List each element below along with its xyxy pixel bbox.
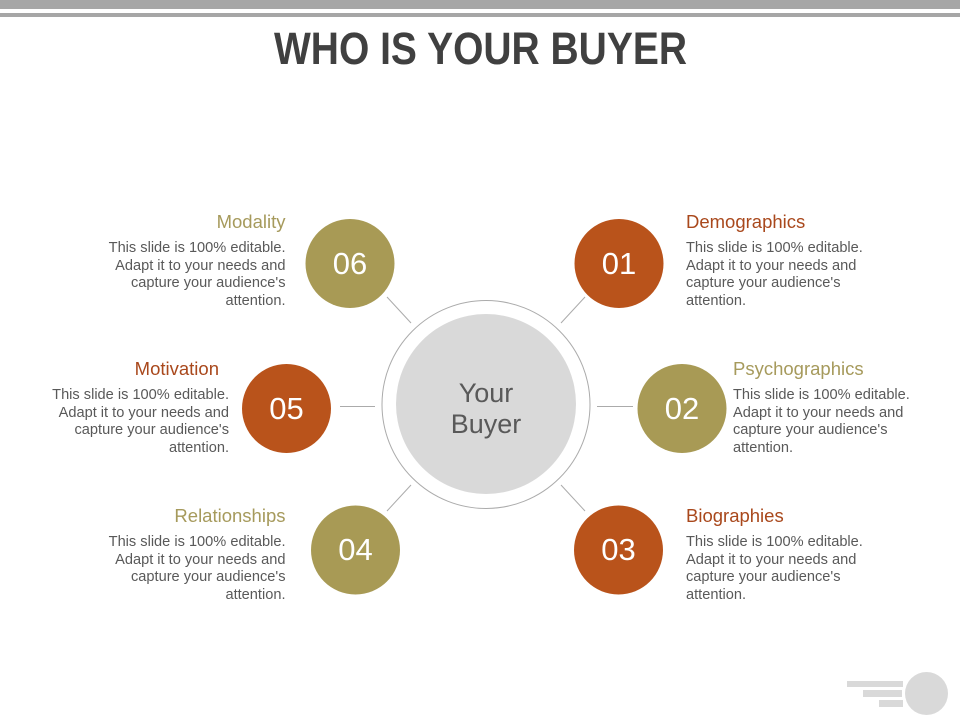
text block: Demographics: capture your audience's: [686, 275, 840, 291]
text block: Motivation: Adapt it to your needs and: [59, 405, 229, 421]
circle 02: [638, 364, 726, 453]
text block: Biographies: Biographies: [686, 505, 784, 526]
circle 01: 01: [602, 246, 636, 281]
text block: Relationships: capture your audience's: [131, 569, 286, 585]
text block: Relationships: [108, 505, 286, 603]
center label: [451, 378, 521, 439]
text block: Psychographics: Psychographics: [733, 358, 864, 379]
center disc: [396, 314, 576, 494]
text block: Biographies: This slide is 100% editable.: [686, 534, 863, 550]
center outer ring: [382, 300, 590, 508]
text block: Demographics: This slide is 100% editable.: [686, 240, 863, 256]
text block: Demographics: [686, 211, 863, 309]
text block: Modality: [108, 211, 286, 309]
text block: Biographies: attention.: [686, 587, 746, 603]
top header bars: [0, 0, 960, 17]
text block: Demographics: Adapt it to your needs and: [686, 258, 856, 274]
text block: Biographies: [686, 505, 863, 603]
circle 03: 03: [601, 532, 636, 567]
text block: Relationships: Adapt it to your needs and: [115, 552, 286, 568]
center label: Buyer: [451, 409, 521, 439]
text block: Psychographics: capture your audience's: [733, 422, 888, 438]
text block: Biographies: Adapt it to your needs and: [686, 552, 856, 568]
circle 03: [574, 506, 663, 594]
text block: Modality: Modality: [217, 211, 286, 232]
text block: Relationships: Relationships: [174, 505, 286, 526]
connector lines: [340, 297, 633, 511]
circle 01: [574, 219, 664, 308]
text block: Psychographics: [733, 358, 910, 456]
text block: Modality: attention.: [225, 293, 286, 309]
center label: Your: [459, 378, 513, 408]
text block: Relationships: This slide is 100% editable.: [109, 534, 286, 550]
text block: Modality: This slide is 100% editable.: [109, 240, 286, 256]
text block: Psychographics: Adapt it to your needs and: [733, 405, 903, 421]
text block: Motivation: attention.: [169, 440, 229, 456]
circle 06: [306, 219, 394, 308]
text block: Psychographics: This slide is 100% editable.: [733, 387, 910, 403]
text block: Psychographics: attention.: [733, 440, 793, 456]
circle 04: 04: [338, 532, 373, 567]
text block: Motivation: [52, 358, 229, 456]
text block: Modality: capture your audience's: [131, 275, 286, 291]
text block: Demographics: attention.: [686, 293, 746, 309]
text block: Demographics: Demographics: [686, 211, 805, 232]
circle 05: [242, 364, 331, 453]
circle 06: 06: [333, 246, 367, 281]
text block: Biographies: capture your audience's: [686, 569, 840, 585]
icon: footer speeding circle: [847, 672, 948, 715]
circle 02: 02: [665, 391, 699, 426]
circle 04: [311, 506, 400, 594]
text block: Modality: Adapt it to your needs and: [115, 258, 286, 274]
text block: Motivation: This slide is 100% editable.: [52, 387, 229, 403]
circle 05: 05: [269, 391, 304, 426]
text block: Relationships: attention.: [225, 587, 286, 603]
text block: Motivation: capture your audience's: [74, 422, 229, 438]
text block: Motivation: Motivation: [135, 358, 219, 379]
